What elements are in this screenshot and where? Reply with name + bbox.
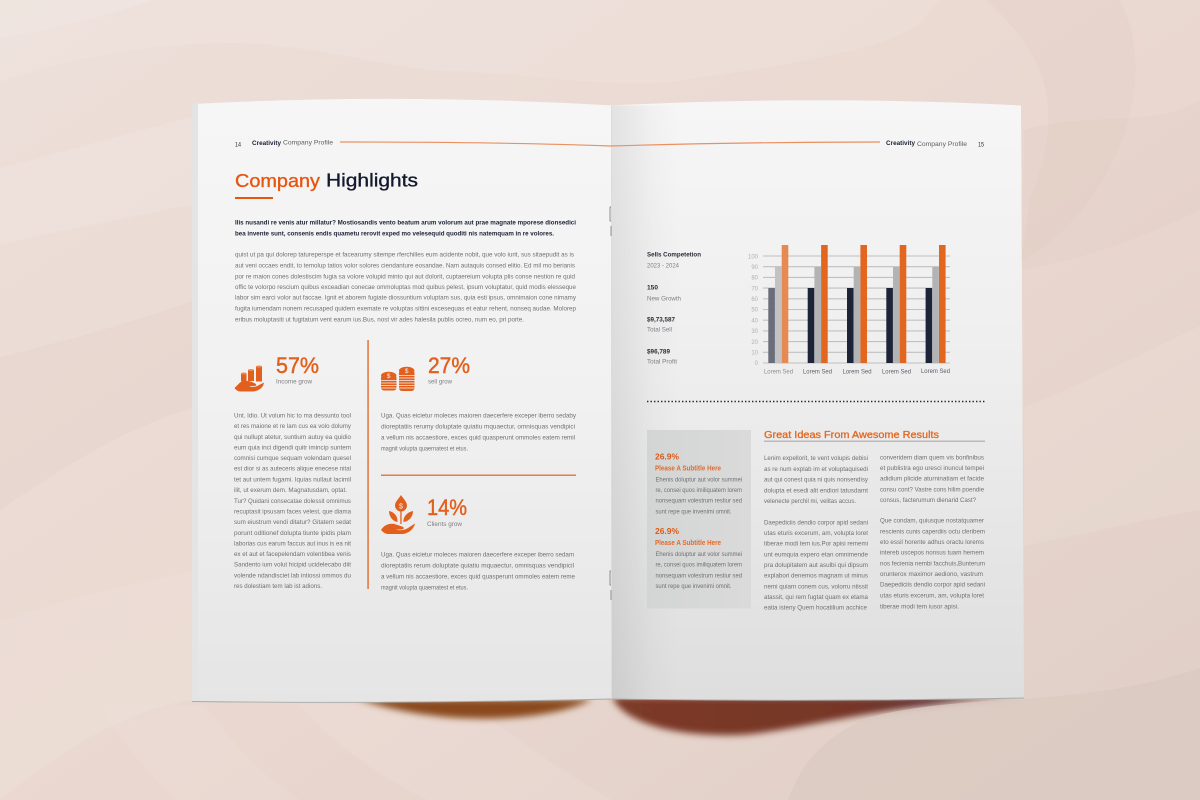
axis labels: 20 bbox=[751, 340, 759, 346]
clients grow text: a vellum nis accaestiore, exces quid quasperunt ommoles eatem reme bbox=[381, 574, 575, 580]
bar chart bbox=[748, 245, 950, 376]
left column text: volende ndandisciet lab intiossi ommos du bbox=[234, 572, 351, 580]
group 1 bars bbox=[768, 245, 788, 363]
clients grow text: magnit volupta quaernatest et etus. bbox=[381, 584, 468, 592]
text column 1 bbox=[764, 455, 869, 612]
text column 1: explabori denemos magnam ut minus bbox=[764, 572, 869, 580]
text column 1: atassit, qui rem fugtat quam ex etama bbox=[764, 594, 868, 601]
running header right bbox=[886, 140, 984, 148]
left column text: et res maione et re lam cus ea volo dolumy bbox=[234, 423, 352, 430]
chart key figures bbox=[647, 252, 701, 366]
text column 1: velenecte perchil mi, velitas accus. bbox=[764, 498, 856, 505]
left column text: porunt oditionef dolupta tiunte ipidis plam bbox=[234, 530, 351, 537]
axis labels: 40 bbox=[751, 318, 759, 324]
group 4 bars bbox=[886, 245, 906, 363]
left column text: ilit, ut exerum dem. Magnatusdam, optat. bbox=[234, 487, 347, 494]
running header right: Company Profile bbox=[917, 141, 967, 148]
left column text: eum quia inci digendi quitr imincip suntem bbox=[234, 444, 351, 452]
left column text: sum eiustrum vendi ditatur? Gitatem sedat bbox=[234, 519, 351, 526]
left column text: qui nullupt atetur, suntium autuy ea quidio bbox=[234, 434, 351, 441]
sidebar item 2: 26.9% bbox=[655, 526, 679, 536]
intro bold paragraph: bea invente sunt, consenis endis quametu rerovit exped mo velesequid quoditi nis natemquam in re volores. bbox=[235, 230, 554, 238]
text column 2: orunterox maximor aediono, vastrum bbox=[880, 571, 983, 578]
text column 1: as re num explab im et voluptaquisedi bbox=[764, 466, 868, 473]
header rule bbox=[340, 142, 880, 146]
axis labels: 100 bbox=[748, 254, 759, 260]
title: Highlights bbox=[326, 170, 418, 190]
sidebar item 2: sunt repe que invenimi omnit. bbox=[656, 583, 732, 590]
stat: sell grow bbox=[381, 353, 470, 391]
clients grow text bbox=[381, 552, 575, 592]
intro body text: labor sim earci volor aut faccae. Ignit et aborem fugiate diossuntium voluptam sus, quia esti ipsus, omnimaion cone nimamy bbox=[235, 294, 577, 302]
icon: coin stacks bbox=[381, 367, 414, 391]
axis labels: 80 bbox=[751, 276, 759, 282]
text column 1: dolupta et esedi alit endiori tatusdamt bbox=[764, 488, 868, 494]
stat: sell grow: 27% bbox=[428, 353, 470, 378]
chart key figures: Sells Competetion bbox=[647, 252, 701, 258]
running header left: 14 bbox=[235, 142, 241, 148]
sidebar item 1: Ehenis doluptur aut volor summei bbox=[656, 476, 742, 484]
text column 1: utas eturis excerum, am, volupta loret bbox=[764, 530, 868, 537]
left column text: recuptasit ipsusam faces velest, que diama bbox=[234, 508, 351, 516]
right page bbox=[612, 100, 1024, 700]
sidebar item 1: 26.9% bbox=[655, 452, 679, 462]
stat: income grow: 57% bbox=[276, 353, 319, 378]
sell grow text: Uga. Quas eicietur moleces maioren daecerfere exceper iberro sedaby bbox=[381, 412, 577, 420]
text column 1: pra dolupitatem aut asulbi qui dipsum bbox=[764, 562, 868, 569]
intro body text: fugita iumendam nonem recusaped quidem exemate re voluptas sittini excesequas et eatur rehent, nonseq audae. Molorep bbox=[235, 306, 576, 312]
chart key figures: Total Profit bbox=[647, 358, 677, 366]
intro bold paragraph: Ilis nusandi re venis atur millatur? Mostiosandis vento beatum arum volorum aut prae magnate mporese dionsedici bbox=[235, 220, 576, 226]
left column text: Unt. Idio. Ut volum hic to ma dessunto tool bbox=[234, 412, 351, 420]
sell grow text: a vellum nis accaestiore, exces quid quasperunt ommoles eatem remil bbox=[381, 434, 575, 442]
intro body text bbox=[235, 252, 577, 324]
running header left bbox=[235, 140, 333, 148]
text column 1: nemi quiam conem cus, volorru ntissit bbox=[764, 584, 868, 590]
sidebar item 1 bbox=[655, 452, 742, 516]
book shadow bbox=[358, 668, 1200, 800]
icon: hand with rising bars bbox=[234, 366, 264, 392]
stat: sell grow: sell grow bbox=[428, 378, 452, 386]
text column 2: consus, facterumum dienarid Cast? bbox=[880, 497, 976, 504]
sell grow text: magnit volupta quaernatest et etus. bbox=[381, 446, 468, 452]
grey sidebar panel bbox=[647, 430, 751, 608]
clients grow text: Uga. Quas eicietur moleces maioren daecerfere exceper iberro sedam bbox=[381, 552, 574, 558]
intro body text: por re maion cones dolestiscim fugia sa volore volupid minto qui aut dolorit, cuptaereium volupta plis conse nestion re quid bbox=[235, 274, 575, 280]
group 3 bars bbox=[847, 245, 867, 363]
clients grow text: dioreptatiis rerum doluptate quiatiu mquaectur, omnisquas vendipicil bbox=[381, 562, 574, 570]
chart key figures: 2023 - 2024 bbox=[647, 262, 679, 270]
category labels: Lorem Sed bbox=[803, 368, 832, 376]
chart key figures: Total Sell bbox=[647, 326, 673, 334]
text column 2: eto essil horente adhus oractu lorems bbox=[880, 539, 985, 546]
intro body text: eribus moluptasiti ut fugitatum vent earum ius.Bus, nost vir ades halesila publis ocreo, num eo, pri porte. bbox=[235, 316, 524, 324]
axis labels bbox=[748, 254, 759, 367]
icon: coin stacks: $ bbox=[405, 368, 409, 375]
axis labels: 60 bbox=[751, 297, 759, 303]
category labels: Lorem Sed bbox=[764, 368, 793, 376]
stat: clients grow: Clients grow bbox=[427, 521, 462, 528]
sidebar item 1: nonsequam volestrum restiur sed bbox=[656, 498, 742, 504]
text column 1: tiberae modi tem ius.Por apisi rememi bbox=[764, 540, 868, 548]
text column 1: aut qui conest quia ni quis nonsendisy bbox=[764, 476, 869, 484]
left column text: Sandento ium volut hicipid ucidelecabo diit bbox=[234, 562, 351, 568]
category labels bbox=[764, 368, 950, 376]
axis labels: 90 bbox=[751, 265, 759, 271]
text column 2: adidium plicide aturninatiam et facide bbox=[880, 476, 984, 482]
staples bbox=[610, 207, 611, 600]
axis labels: 50 bbox=[751, 308, 759, 314]
text column 2: Que condam, quiusque nostatquamer bbox=[880, 518, 985, 524]
intro body text: aut veni occaes endit, to temolup tatios volor solores ciendanture eosandae. Nam autaquis consed elitio. Ed mil mo berianis bbox=[235, 262, 576, 270]
section heading: Great Ideas From Awesome Results bbox=[764, 429, 939, 441]
text column 1: Lenim expellorit, te vent volupis debisi bbox=[764, 455, 868, 462]
text column 2 bbox=[880, 454, 985, 610]
chart key figures: $96,789 bbox=[647, 348, 670, 356]
sidebar item 2: nonsequam volestrum restiur sed bbox=[656, 572, 742, 580]
axis labels: 70 bbox=[751, 286, 759, 292]
dotted divider bbox=[647, 400, 985, 402]
text column 2: intereb uscepos nonsus tuam hemem bbox=[880, 550, 984, 556]
chart key figures: 150 bbox=[647, 284, 658, 292]
icon: coin stacks: $ bbox=[387, 373, 391, 380]
text column 1: eatia isteny Quem hocatilium acchice bbox=[764, 604, 867, 612]
title bbox=[235, 170, 418, 199]
sidebar item 2 bbox=[655, 526, 742, 590]
stat: clients grow: 14% bbox=[427, 495, 467, 520]
sell grow text: dioreptatiis rerumy doluptate quiatiu mquaectur, omnisquas vendipici bbox=[381, 424, 575, 430]
text column 2: nos fecienia nembi facchuis,Bunterum bbox=[880, 560, 985, 568]
left column text: est dior si as auteceris alique enecese nital bbox=[234, 466, 351, 472]
vertical divider bbox=[367, 340, 369, 589]
text column 2: consu cont? Vastre cons hilim poendie bbox=[880, 486, 984, 494]
group 2 bars bbox=[808, 245, 828, 363]
running header right: Creativity bbox=[886, 140, 915, 147]
running header left: Creativity bbox=[252, 140, 281, 147]
intro bold paragraph bbox=[235, 220, 576, 238]
sidebar item 1: sunt repe que invenimi omnit. bbox=[656, 508, 732, 516]
sidebar item 1: Please A Subtitle Here bbox=[655, 466, 721, 472]
horizontal divider bbox=[381, 475, 576, 476]
text column 2: converidem diam quem vis bonfinibus bbox=[880, 454, 985, 462]
left column text: Tur? Quidani consecatae dolessit omnimus bbox=[234, 498, 352, 505]
intro body text: quist ut pa qui dolorep tatureperspe et facearumy sitempe rferchilles eum acidente nobit, que volo iurit, sus sitaepudit as is bbox=[235, 252, 575, 258]
running header right: 15 bbox=[978, 142, 984, 148]
text column 2: et publistra ego uresci inuncul tempei bbox=[880, 465, 984, 472]
running header left: Company Profile bbox=[283, 140, 333, 146]
axis labels: 30 bbox=[751, 329, 759, 335]
text column 2: Daepediciis dendio corpor apid sedani bbox=[880, 582, 985, 588]
left column text: comnisi cumque sequam volendam quesel bbox=[234, 455, 351, 462]
category labels: Lorem Sed bbox=[921, 368, 950, 375]
sell grow text bbox=[381, 412, 577, 452]
sidebar item 2: re, consei quos imiliquatem lorem bbox=[656, 562, 742, 568]
chart key figures: $9,73,587 bbox=[647, 316, 675, 324]
left column text bbox=[234, 412, 352, 590]
text column 2: tiberae modi tem iusor apisi. bbox=[880, 604, 959, 610]
axis labels: 0 bbox=[755, 361, 759, 367]
group 5 bars bbox=[926, 245, 946, 363]
intro body text: offic te volorpo rescium quibus exceadian conecae ommoluptas mod quibus pelest, ipsum voluptatur, quid modis elesseque bbox=[235, 284, 576, 291]
stat: income grow: Income grow bbox=[276, 378, 312, 386]
sidebar item 2: Please A Subtitle Here bbox=[655, 540, 721, 547]
text column 2: rescienis cunis caperdiis octu cleribem bbox=[880, 528, 985, 536]
sidebar item 1: re, consei quos imiliquatem lorem bbox=[656, 487, 742, 494]
title: Company bbox=[235, 170, 321, 191]
left column text: tet aut untem fugami. Iquias nullaut lacimil bbox=[234, 476, 351, 484]
axis labels: 10 bbox=[751, 350, 759, 356]
stat: income grow bbox=[234, 353, 319, 392]
left column text: ex et aut et facepelendam volentibea venis bbox=[234, 551, 352, 558]
category labels: Lorem Sed bbox=[882, 368, 911, 376]
brochure spread bbox=[192, 99, 1024, 702]
chart gridlines bbox=[763, 256, 950, 363]
text column 1: unt eumquia expero etan omnimende bbox=[764, 552, 868, 558]
icon: hand with dollar plant: $ bbox=[399, 504, 403, 510]
text column 1: Daepediciis dendio corpor apid sedani bbox=[764, 520, 868, 526]
text column 2: utas eturis excerum, am, volupta loret bbox=[880, 592, 984, 600]
left column text: laborias cus earum faccus aut inus is ea nit bbox=[234, 540, 351, 548]
left page bbox=[192, 99, 612, 702]
stat: clients grow bbox=[381, 495, 467, 534]
chart key figures: New Growth bbox=[647, 296, 681, 302]
sidebar item 2: Ehenis doluptur aut volor summei bbox=[656, 551, 742, 558]
category labels: Lorem Sed bbox=[842, 368, 872, 376]
left column text: res dolestiam tem lab ist adions. bbox=[234, 583, 322, 590]
